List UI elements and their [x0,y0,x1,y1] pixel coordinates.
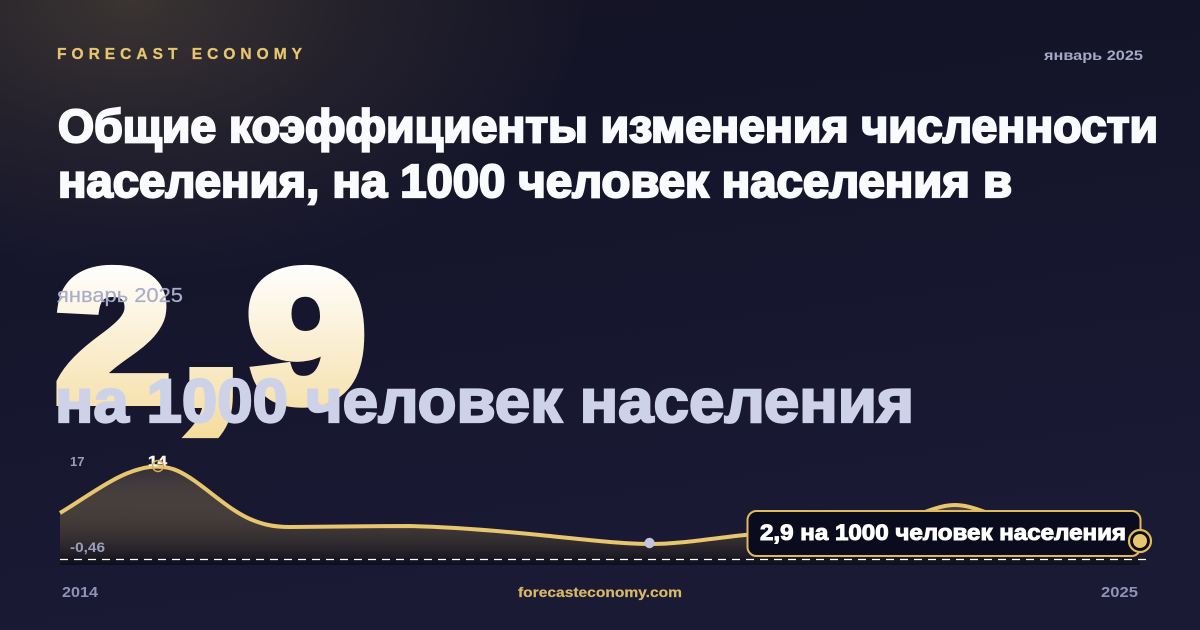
title: населения, на 1000 человек населения в [58,155,1012,207]
peak marker [152,460,164,472]
unit label: на 1000 человек населения [55,367,914,435]
callout: 2,9 на 1000 человек населения [760,520,1126,545]
chart area fill [60,467,1140,565]
line chart [60,454,1146,565]
callout [748,511,1140,556]
big value: 9 [248,233,365,440]
website: forecasteconomy.com [518,584,682,600]
date subtitle: январь 2025 [57,285,183,307]
big value [56,226,365,444]
axis max label: 17 [70,454,84,469]
big value: 2 [56,233,170,440]
current value marker [1129,530,1151,552]
date top right: январь 2025 [1044,47,1143,63]
start year: 2014 [62,585,98,601]
chart line [60,467,1140,544]
peak label: 14 [148,454,167,470]
baseline [60,558,1146,560]
big value: , [181,226,241,444]
brand label: FORECAST ECONOMY [57,46,303,63]
title [58,100,1158,207]
minimum marker [644,538,655,548]
axis min label: -0,46 [70,539,105,555]
end year: 2025 [1101,585,1138,601]
title: Общие коэффициенты изменения численности [58,100,1158,152]
